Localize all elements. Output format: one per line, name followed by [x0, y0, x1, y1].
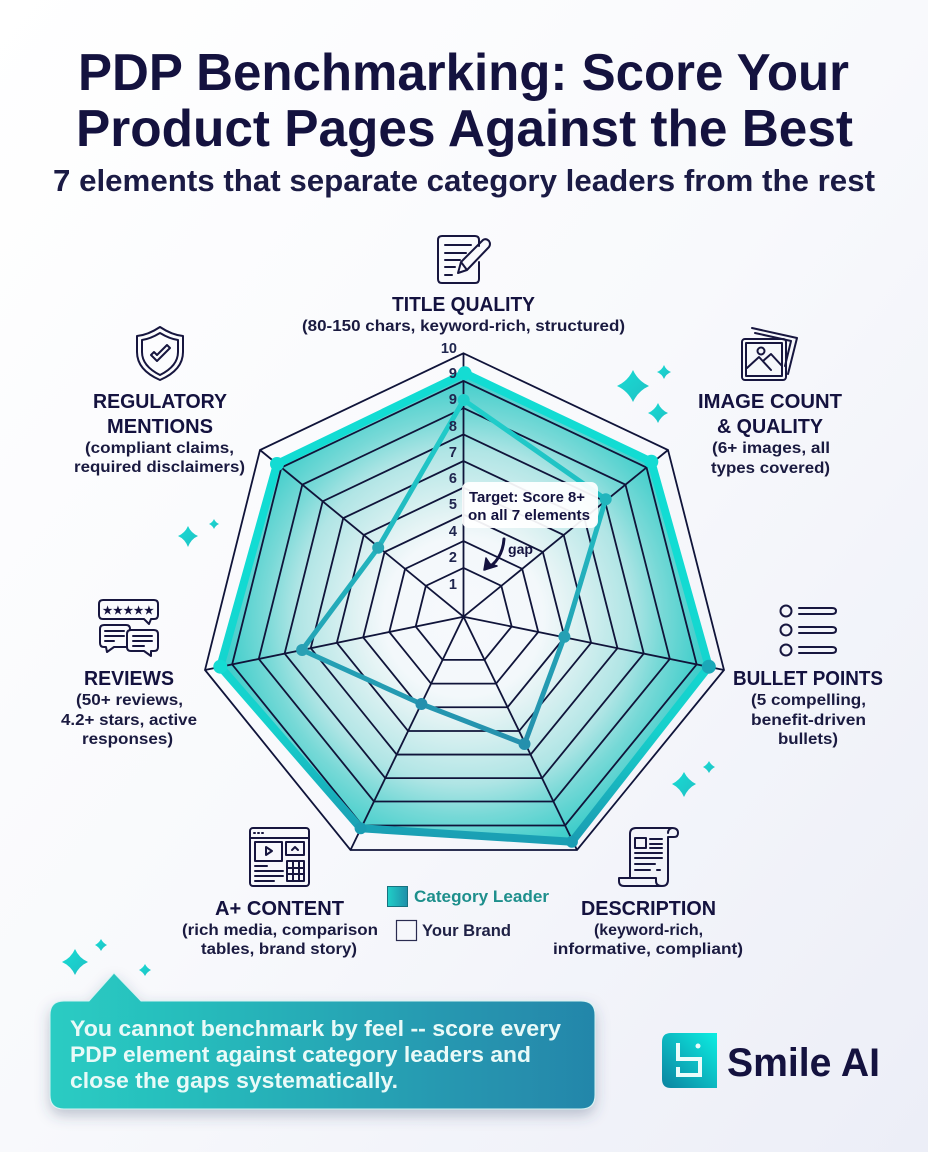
callout text: close the gaps systematically. [70, 1068, 398, 1093]
text: a+ content detail: tables, brand story) [201, 941, 357, 958]
axis numbers: 9 [449, 366, 457, 382]
text: reviews detail [61, 692, 197, 748]
element: description [553, 828, 743, 958]
text: description detail: (keyword-rich, [594, 922, 703, 939]
element: regulatory mentions [74, 327, 245, 476]
heading: regulatory mentions: MENTIONS [107, 416, 213, 438]
text: image count detail: types covered) [711, 460, 830, 477]
sparkles: upper right [617, 365, 671, 423]
heading: a+ content: A+ CONTENT [215, 898, 344, 920]
text: bullet points detail: bullets) [778, 731, 838, 748]
legend [388, 886, 549, 940]
radar chart [205, 341, 724, 850]
axis numbers: 5 [449, 497, 457, 513]
sparkles: lower right [672, 761, 715, 797]
text: description detail: informative, compliant) [553, 941, 743, 958]
axis numbers: 2 [449, 550, 457, 566]
text: bullet points detail: benefit-driven [751, 712, 866, 729]
text: reviews detail: 4.2+ stars, active [61, 712, 197, 729]
axis numbers: 9 [449, 392, 457, 408]
your brand outline [296, 394, 612, 750]
gap arrow [484, 539, 533, 570]
icon: logo mark [662, 1033, 717, 1088]
text: a+ content detail: (rich media, comparison [182, 922, 378, 939]
axis numbers: 8 [449, 419, 457, 435]
category leader outline [213, 366, 716, 848]
icon: a+ content browser [250, 828, 309, 886]
text: a+ content detail [182, 922, 378, 958]
text: regulatory detail [74, 440, 245, 476]
icon: review speech bubbles [99, 600, 158, 656]
callout text: You cannot benchmark by feel -- score every [70, 1016, 562, 1041]
text: reviews detail: (50+ reviews, [76, 692, 183, 709]
sparkles: bottom left [62, 939, 151, 976]
callout text [70, 1016, 562, 1093]
axis numbers: 6 [449, 471, 457, 487]
text: regulatory detail: (compliant claims, [85, 440, 234, 457]
logo [662, 1033, 880, 1088]
icon: title document and pencil [438, 236, 490, 283]
gap arrow: gap [508, 541, 533, 557]
title [76, 44, 853, 158]
icon: bullet list [780, 606, 836, 656]
heading: image count [698, 391, 842, 438]
subtitle: 7 elements that separate category leaders from the rest [53, 163, 875, 198]
text: image count detail [711, 440, 830, 477]
element: bullet points [733, 606, 883, 748]
heading: image count: & QUALITY [717, 416, 824, 438]
title: Product Pages Against the Best [76, 100, 853, 158]
icon: review speech bubbles: ★★★★★ [103, 605, 154, 617]
heading: description: DESCRIPTION [581, 898, 716, 920]
title: PDP Benchmarking: Score Your [78, 44, 849, 102]
callout text: PDP element against category leaders and [70, 1042, 531, 1067]
text: bullet points detail [751, 692, 866, 748]
legend: your brand: Your Brand [422, 921, 511, 940]
text: description detail [553, 922, 743, 958]
target callout: Target: Score 8+ [469, 490, 585, 506]
logo wordmark: Smile AI [727, 1041, 880, 1085]
target callout: on all 7 elements [468, 508, 590, 524]
element: title quality [302, 236, 625, 335]
heading: bullet points: BULLET POINTS [733, 668, 883, 690]
heading: image count: IMAGE COUNT [698, 391, 842, 413]
callout box [50, 973, 595, 1109]
heading: regulatory mentions: REGULATORY [93, 391, 228, 413]
text: title quality detail: (80-150 chars, keyword-rich, structured) [302, 318, 625, 335]
text: bullet points detail: (5 compelling, [751, 692, 866, 709]
axis numbers: 1 [449, 577, 457, 593]
legend: category leader: Category Leader [414, 887, 549, 906]
target callout [462, 482, 598, 528]
axis numbers [441, 341, 457, 593]
text: reviews detail: responses) [82, 731, 173, 748]
icon: shield with check [137, 327, 183, 380]
element: a+ content [182, 828, 378, 958]
heading: title quality: TITLE QUALITY [392, 294, 536, 316]
axis numbers: 4 [449, 524, 457, 540]
icon: scroll document [619, 828, 678, 886]
radar grid [205, 353, 724, 850]
element: reviews [61, 600, 197, 748]
axis numbers: 10 [441, 341, 457, 357]
element: image count and quality [698, 328, 842, 477]
sparkles: left [178, 519, 219, 547]
category leader area [220, 373, 709, 842]
axis numbers: 7 [449, 445, 457, 461]
text: regulatory detail: required disclaimers) [74, 459, 245, 476]
icon: stacked pictures [742, 328, 797, 380]
text: image count detail: (6+ images, all [712, 440, 830, 457]
heading: reviews: REVIEWS [84, 668, 174, 690]
heading: regulatory mentions [93, 391, 228, 438]
